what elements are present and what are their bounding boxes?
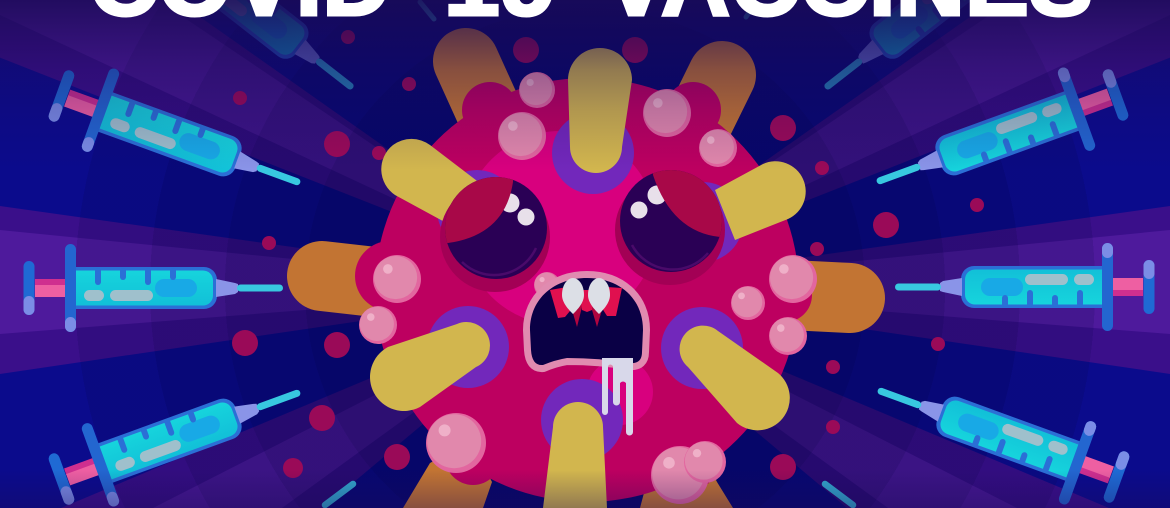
syringe: upper left	[48, 68, 300, 186]
right eye	[615, 170, 725, 285]
title	[94, 0, 1090, 18]
virus	[322, 48, 850, 508]
purple spike sockets	[427, 112, 743, 461]
left eye	[435, 170, 550, 292]
needle: bottom far left syringe	[325, 484, 353, 505]
syringe: middle left	[24, 244, 283, 332]
bottom darkening fade	[0, 474, 1170, 508]
needle: bottom far right syringe	[825, 484, 853, 505]
floating virus particles	[232, 30, 984, 480]
yellow spikes	[370, 48, 806, 508]
syringe: top far right (faded)	[824, 0, 970, 90]
syringe: top far left (faded)	[218, 0, 354, 90]
top darkening fade	[0, 0, 1170, 170]
drool	[602, 358, 633, 436]
syringe: lower left	[48, 390, 300, 506]
orange rear spikes	[322, 61, 850, 508]
virus body	[355, 78, 812, 502]
syringe: lower right	[878, 388, 1130, 504]
mouth	[530, 272, 643, 365]
syringe: upper right	[876, 68, 1128, 184]
lighter face patches	[482, 131, 653, 425]
pink bubbles on the virus	[359, 72, 817, 504]
needles near title	[420, 2, 752, 19]
syringe: middle right	[895, 243, 1154, 331]
